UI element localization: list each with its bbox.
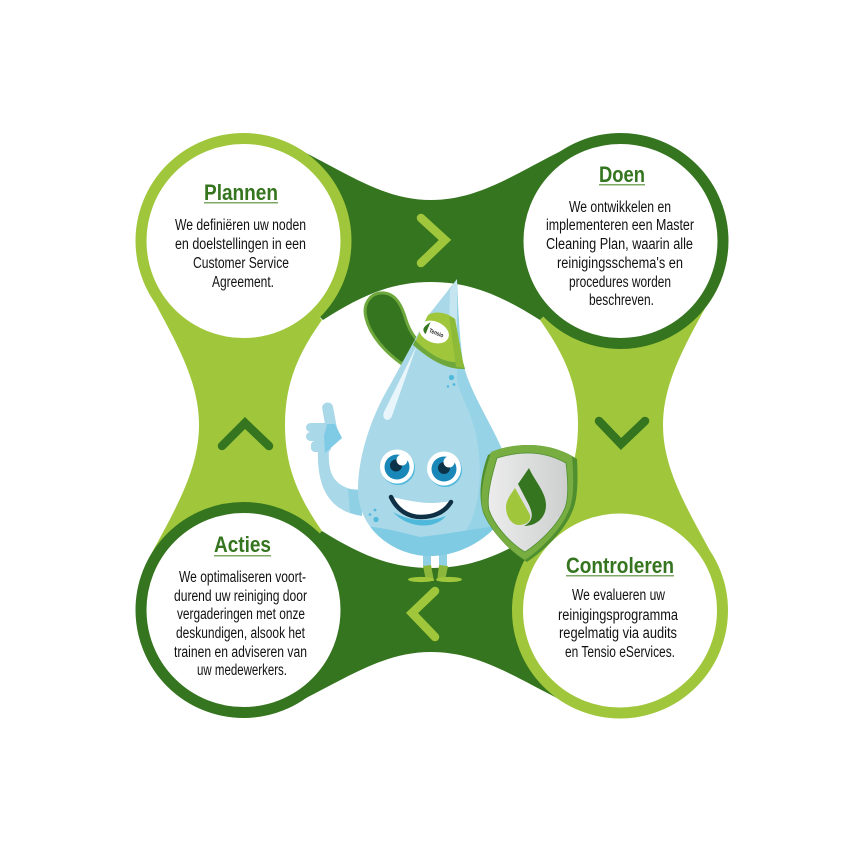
text: Plannen body bbox=[175, 217, 306, 291]
text: Doen body: reinigingsschema's en bbox=[557, 255, 683, 272]
text: Acties body bbox=[174, 569, 307, 679]
drop body bbox=[358, 279, 502, 556]
text: Acties body: vergaderingen met onze bbox=[177, 606, 305, 623]
text: Doen body: implementeren een Master bbox=[546, 217, 694, 234]
text: Acties body: We optimaliseren voort- bbox=[179, 569, 306, 586]
text: Doen body: We ontwikkelen en bbox=[569, 199, 671, 216]
connector: right light green bbox=[540, 241, 715, 610]
panel: Doen bbox=[518, 138, 723, 344]
text: Acties body: durend uw reiniging door bbox=[174, 588, 307, 605]
text: Plannen body: We definiëren uw noden bbox=[175, 217, 306, 234]
cap band bbox=[413, 312, 465, 369]
text: Controleren body: We evalueren uw bbox=[572, 587, 666, 604]
text: Acties body: trainen en adviseren van bbox=[174, 644, 307, 661]
panel: Controleren bbox=[518, 508, 722, 713]
arm and hand bbox=[306, 402, 362, 516]
legs and feet bbox=[408, 550, 462, 582]
mascot: water drop bbox=[306, 275, 520, 582]
text: Controleren body: reinigingsprogramma bbox=[558, 607, 678, 624]
connector: left light green bbox=[148, 241, 322, 610]
text: Acties body: deskundigen, alsook het bbox=[176, 625, 306, 642]
text: Doen body: beschreven. bbox=[589, 292, 654, 309]
connector: top dark green bbox=[243, 150, 620, 320]
text: Controleren body: en Tensio eServices. bbox=[565, 644, 675, 661]
cap brim bbox=[365, 293, 422, 364]
shield drop icon bbox=[506, 468, 546, 526]
panel: Acties bbox=[141, 508, 346, 712]
text: Acties body: uw medewerkers. bbox=[197, 662, 287, 679]
heading: Controleren: Controleren bbox=[566, 553, 674, 578]
text: Plannen body: Customer Service bbox=[193, 255, 289, 272]
connector: bottom dark green bbox=[243, 531, 620, 701]
eyes bbox=[380, 450, 462, 487]
arrow: right bbox=[421, 218, 445, 263]
arrow: up bbox=[222, 423, 269, 446]
text: Controleren body bbox=[558, 587, 678, 661]
drop highlight bbox=[383, 345, 417, 420]
cycle infographic bbox=[136, 133, 728, 718]
text: Controleren body: regelmatig via audits bbox=[559, 625, 677, 642]
text: Doen body bbox=[546, 199, 694, 309]
panel: Plannen bbox=[141, 138, 346, 344]
smile bbox=[391, 497, 451, 526]
heading: Acties: Acties bbox=[214, 532, 271, 557]
shield bbox=[481, 445, 577, 562]
text: Doen body: procedures worden bbox=[569, 274, 671, 291]
heading: Doen: Doen bbox=[599, 162, 645, 187]
bubbles bbox=[369, 375, 455, 522]
text: Plannen body: Agreement. bbox=[212, 274, 274, 291]
text: Plannen body: en doelstellingen in een bbox=[175, 236, 306, 253]
text: Doen body: Cleaning Plan, waarin alle bbox=[546, 236, 693, 253]
heading: Plannen: Plannen bbox=[204, 180, 278, 205]
arrow: left bbox=[412, 591, 435, 637]
cap logo: Tensio bbox=[428, 328, 444, 340]
arrow: down bbox=[599, 421, 645, 444]
